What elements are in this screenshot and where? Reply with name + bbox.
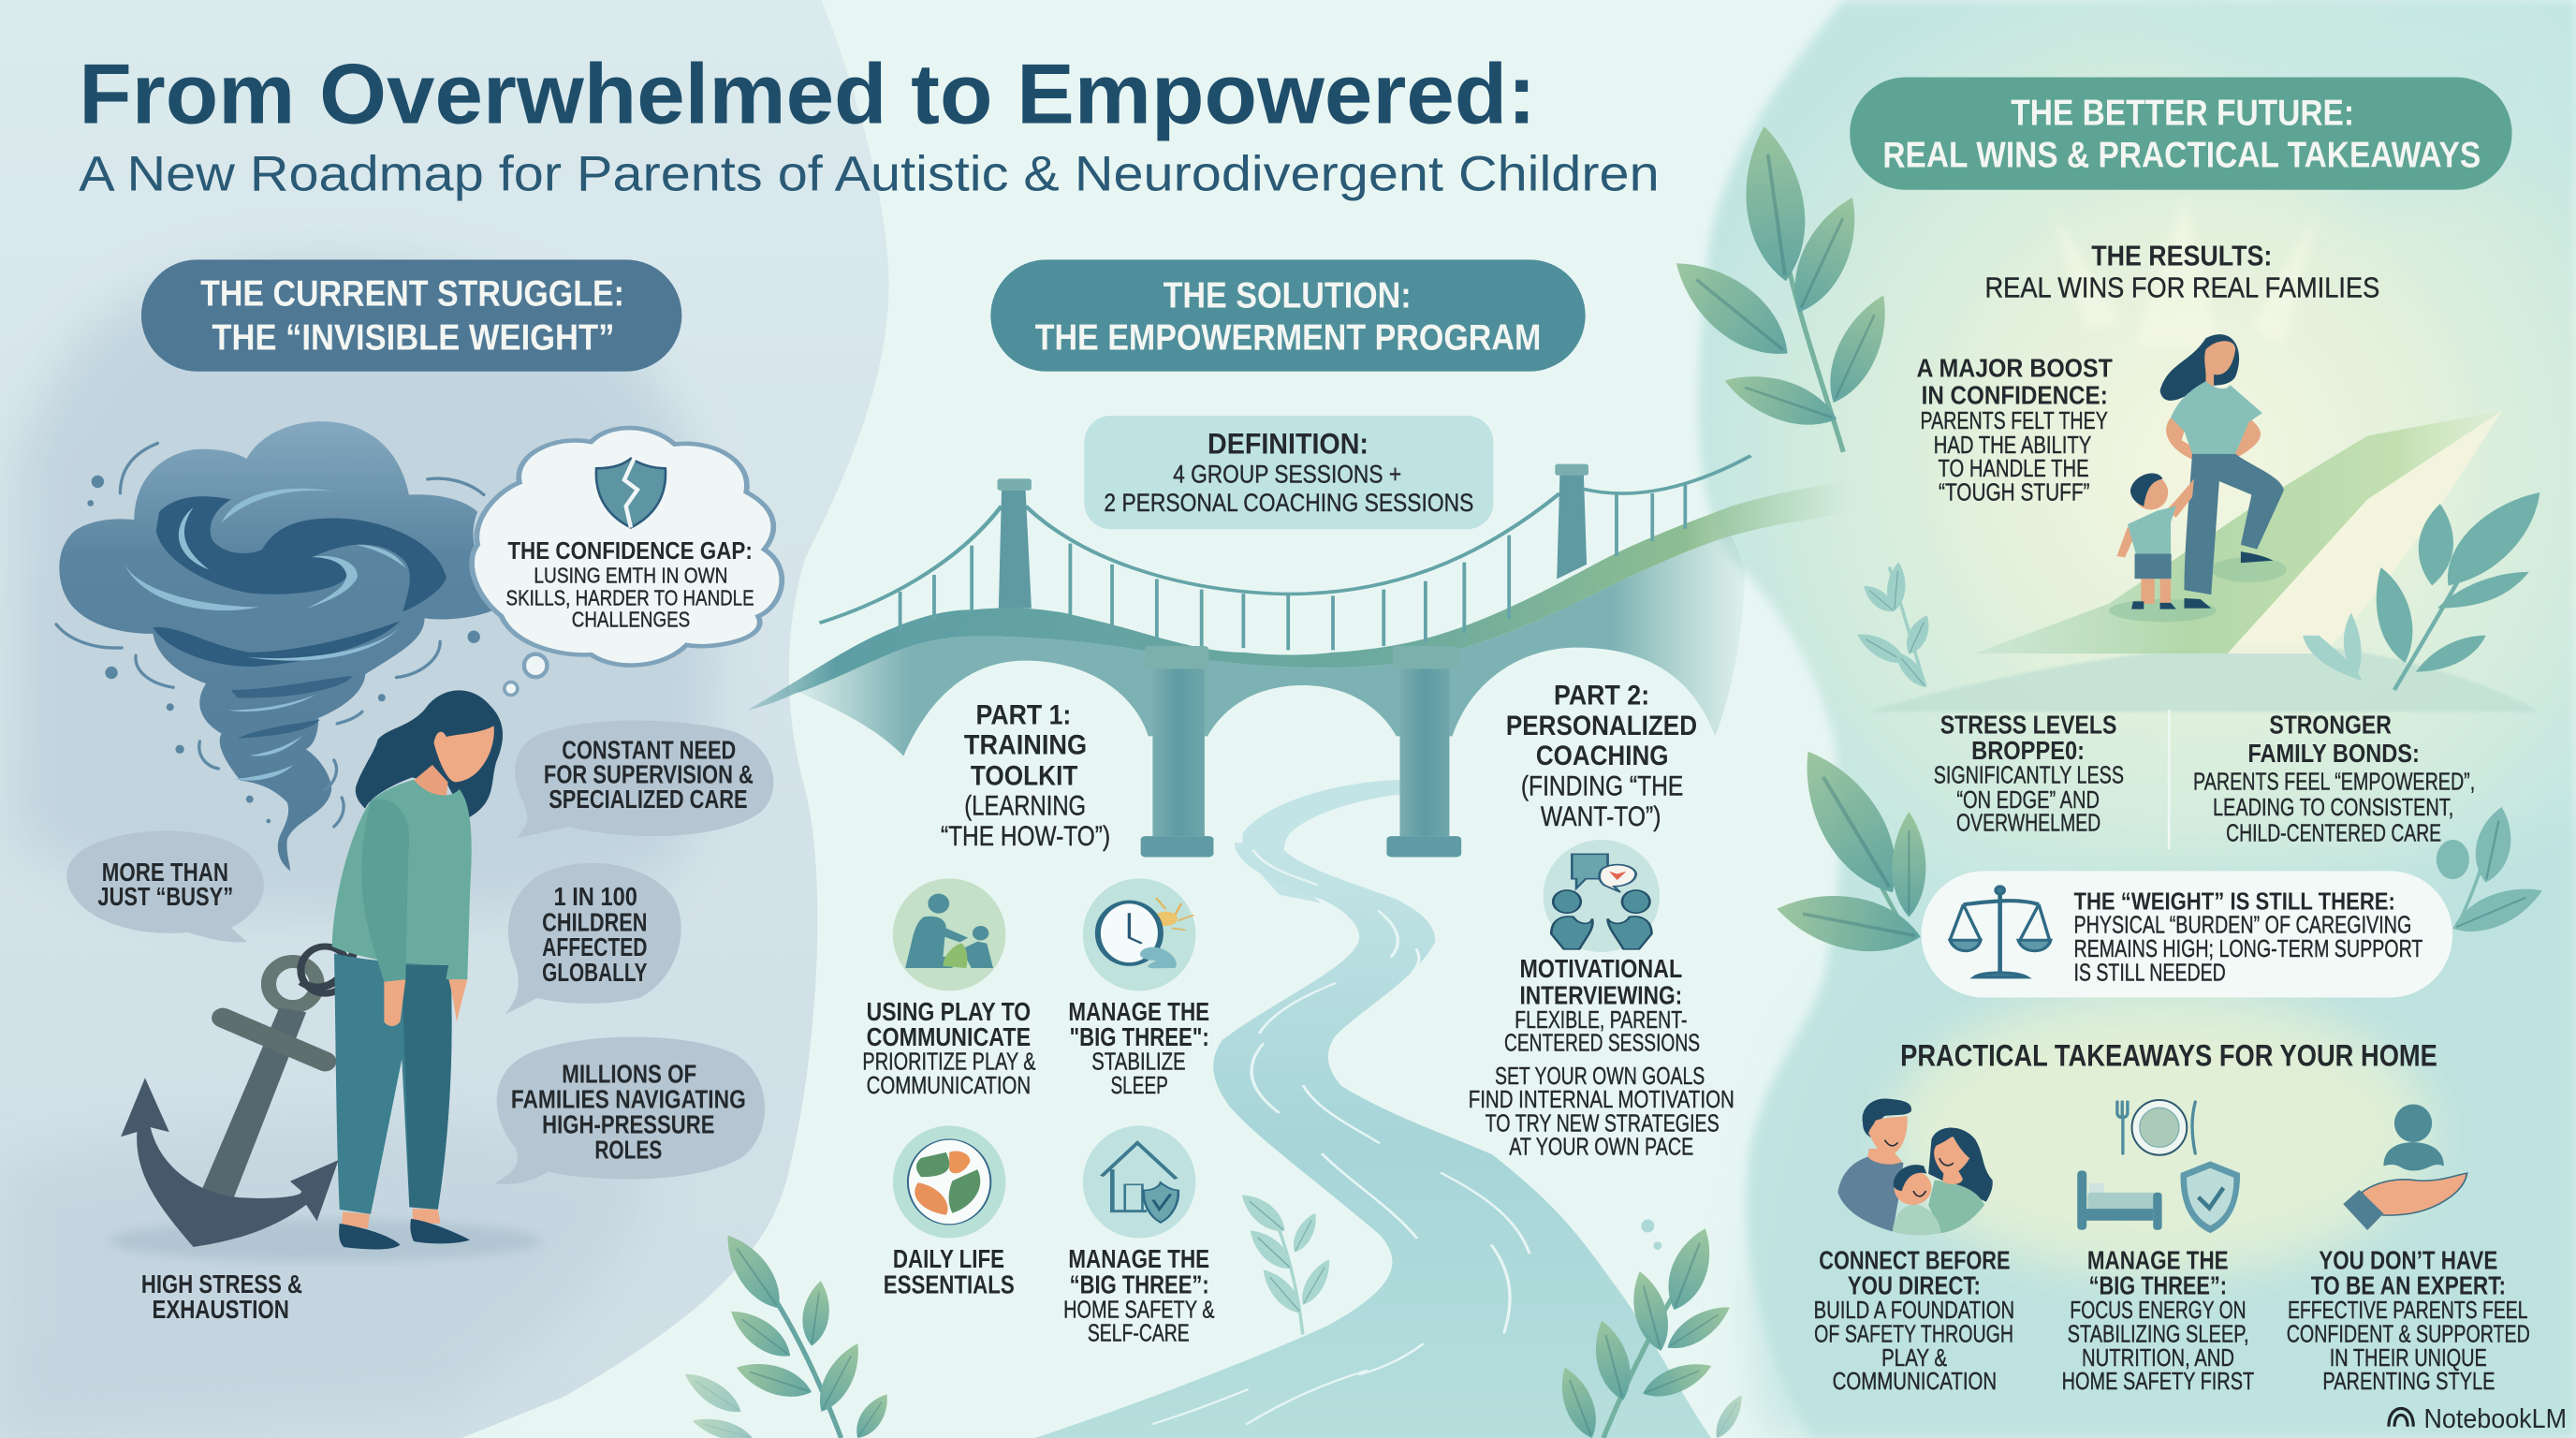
definition box: 4 GROUP SESSIONS + [1173,460,1401,489]
pill heading: current struggle [141,259,681,372]
icon: storm cloud [56,421,494,871]
panel: the solution [862,259,1734,1346]
pill heading: better future [1850,78,2512,190]
figure: confident mother [2160,334,2284,609]
takeaway: connect before you direct: OF SAFETY THROUGH [1814,1321,2013,1347]
hillside scene [1852,334,2539,712]
win: family bonds: PARENTS FEEL “EMPOWERED”, [2193,769,2475,795]
stat: high stress: HIGH STRESS & [141,1269,302,1299]
plant: lower centre left [680,1226,896,1438]
icon: clock and sun [1083,878,1195,990]
skill: big three sleep: STABILIZE [1091,1049,1186,1075]
icon: anchor [121,946,355,1247]
NotebookLM logo: NotebookLM [2423,1404,2567,1434]
stat: high stress [141,1269,302,1324]
plant: small sprig on hill [1852,562,1935,692]
win: confidence boost: PARENTS FELT THEY [1921,408,2108,434]
thought bubble: confidence gap: LUSING EMTH IN OWN [534,563,728,587]
skill: using play: PRIORITIZE PLAY & [862,1049,1036,1075]
win: family bonds [2193,710,2475,847]
icon: plate, bed and shield [2077,1100,2240,1233]
speech blob: one in one hundred: GLOBALLY [542,958,648,987]
icon: play together [893,878,1005,990]
thought bubble: confidence gap: SKILLS, HARDER TO HANDLE [506,586,754,610]
callout: the weight is still there [1922,871,2452,998]
takeaway: manage the big three: HOME SAFETY FIRST [2062,1369,2254,1395]
speech blob: more than busy [66,830,264,942]
win: stress dropped: STRESS LEVELS [1940,710,2116,739]
part 1 heading [941,699,1110,852]
pill heading: better future: THE BETTER FUTURE: [2011,93,2354,133]
panel: left background wash [0,0,889,1438]
takeaway: you do not have to be an expert: YOU DON’T HAVE [2319,1246,2497,1275]
icon: supportive hand and person [2343,1104,2467,1230]
pill heading: the solution: THE SOLUTION: [1164,275,1412,315]
speech blob: millions of families: MILLIONS OF [562,1059,696,1088]
skill: daily life [884,1244,1015,1299]
part 1 heading: “THE HOW-TO”) [941,821,1110,852]
skill: daily life: DAILY LIFE [893,1244,1004,1273]
subtitle: A New Roadmap for Parents of Autistic & Neurodivergent Children [79,147,1660,202]
skill: big three safety [1063,1244,1215,1346]
pill heading: the solution [990,259,1586,372]
takeaway: you do not have to be an expert: IN THEIR UNIQUE [2330,1345,2487,1372]
callout: the weight is still there: IS STILL NEEDED [2073,960,2226,986]
takeaway: manage the big three [2062,1246,2254,1395]
title: From Overwhelmed to Empowered: [79,47,1536,142]
speech blob: millions of families: FAMILIES NAVIGATING [511,1085,746,1114]
skill: motivational interviewing: FIND INTERNAL MOTIVATION [1469,1087,1734,1113]
icon: home safety [1083,1125,1195,1238]
win: confidence boost: HAD THE ABILITY [1934,433,2091,459]
pill heading: current struggle: THE “INVISIBLE WEIGHT” [212,317,614,358]
bridge piers [1141,646,1461,857]
definition box: DEFINITION: [1208,426,1368,460]
speech blob: millions of families: ROLES [594,1136,662,1165]
skill: big three safety: MANAGE THE [1068,1244,1209,1273]
skill: motivational interviewing: SET YOUR OWN GOALS [1495,1064,1705,1090]
skill: motivational interviewing: AT YOUR OWN PACE [1509,1135,1693,1161]
skill: motivational interviewing: FLEXIBLE, PARENT- [1515,1007,1687,1034]
skill: motivational interviewing [1469,954,1734,1161]
plant: beside river [1236,1187,1337,1334]
skill: using play: COMMUNICATION [867,1073,1031,1099]
takeaway: connect before you direct: BUILD A FOUNDATION [1814,1298,2014,1324]
icon: balance scale [1950,887,2051,977]
results heading: THE RESULTS: [2091,240,2272,272]
skill: big three safety: “BIG THREE”: [1070,1270,1209,1299]
pill heading: the solution: THE EMPOWERMENT PROGRAM [1035,317,1541,358]
speech blob: constant need: CONSTANT NEED [562,735,736,764]
skill: big three sleep: "BIG THREE": [1070,1022,1209,1051]
takeaway: manage the big three: NUTRITION, AND [2082,1345,2234,1372]
suspension cables and towers [820,456,1750,650]
definition box [1084,416,1493,529]
plant: upper right large [1660,123,1901,452]
pill heading: current struggle: THE CURRENT STRUGGLE: [200,274,624,315]
speech blob: one in one hundred: CHILDREN [542,907,648,936]
win: stress dropped: BROPPE0: [1971,736,2085,765]
takeaway: manage the big three: “BIG THREE”: [2089,1271,2227,1300]
part 2 heading: PART 2: [1554,680,1649,711]
icon: broken shield [596,459,666,527]
skill: big three safety: SELF-CARE [1088,1320,1190,1346]
definition box: 2 PERSONAL COACHING SESSIONS [1104,488,1473,517]
bridge [748,456,1850,857]
part 2 heading: WANT-TO”) [1541,801,1661,832]
skill: motivational interviewing: TO TRY NEW STRATEGIES [1486,1110,1720,1137]
bridge arches [795,536,1745,756]
speech blob: constant need: SPECIALIZED CARE [549,785,748,814]
speech blob: one in one hundred: 1 IN 100 [553,882,637,911]
skill: big three sleep: MANAGE THE [1068,997,1209,1026]
skill: using play: USING PLAY TO [867,997,1031,1026]
win: stress dropped [1934,710,2124,836]
win: stress dropped: SIGNIFICANTLY LESS [1934,763,2124,789]
river path [1034,780,1711,1438]
callout: the weight is still there: THE “WEIGHT” IS STILL THERE: [2073,888,2395,915]
results heading: REAL WINS FOR REAL FAMILIES [1985,271,2379,304]
skill: using play: COMMUNICATE [867,1022,1031,1051]
takeaways heading: PRACTICAL TAKEAWAYS FOR YOUR HOME [1900,1039,2437,1073]
thought bubble: confidence gap: CHALLENGES [572,608,690,632]
part 1 heading: TRAINING [964,730,1087,761]
part 2 heading: (FINDING “THE [1521,770,1683,801]
skill: big three safety: HOME SAFETY & [1063,1297,1215,1323]
speech blob: one in one hundred [505,863,681,1015]
icon: family [1837,1099,1993,1235]
speech blob: millions of families: HIGH-PRESSURE [542,1110,714,1139]
win: family bonds: FAMILY BONDS: [2247,739,2420,768]
win: confidence boost: A MAJOR BOOST [1917,354,2113,383]
skill: motivational interviewing: INTERVIEWING: [1519,981,1682,1010]
panel: current struggle [56,259,782,1324]
part 2 heading [1506,680,1697,832]
callout: the weight is still there: PHYSICAL “BURDEN” OF CAREGIVING [2073,913,2411,939]
speech blob: millions of families [494,1037,765,1184]
ground shadow [109,1220,542,1262]
part 1 heading: PART 1: [976,699,1071,730]
panel: the better future [1814,78,2539,1395]
icon: motivational conversation [1544,840,1660,952]
part 1 heading: TOOLKIT [971,761,1077,792]
speech blob: more than busy: MORE THAN [102,858,228,887]
win: confidence boost: TO HANDLE THE [1938,456,2089,482]
pill heading: better future: REAL WINS & PRACTICAL TAKEAWAYS [1882,135,2481,175]
win: confidence boost: IN CONFIDENCE: [1922,381,2108,410]
win: stress dropped: “ON EDGE” AND [1956,787,2100,814]
skill: motivational interviewing: MOTIVATIONAL [1519,954,1682,983]
icon: nutrition plate [893,1125,1005,1238]
results heading [1985,240,2379,304]
figure: overwhelmed mother [332,690,503,1249]
panel: right background wash [1698,0,2576,1438]
win: stress dropped: OVERWHELMED [1956,810,2100,836]
takeaway: you do not have to be an expert: TO BE AN EXPERT: [2311,1271,2506,1300]
takeaway: you do not have to be an expert: PARENTING STYLE [2322,1369,2495,1395]
plant: right of weight pill [2437,803,2548,943]
thought bubble: confidence gap: THE CONFIDENCE GAP: [507,538,753,565]
speech blob: one in one hundred: AFFECTED [542,932,648,961]
takeaway: you do not have to be an expert [2287,1246,2530,1395]
win: confidence boost: “TOUGH STUFF” [1939,479,2089,506]
skill: using play [862,997,1036,1099]
part 1 heading: (LEARNING [964,791,1086,822]
takeaway: connect before you direct: COMMUNICATION [1833,1369,1997,1395]
win: family bonds: LEADING TO CONSISTENT, [2213,795,2453,821]
skill: motivational interviewing: CENTERED SESSIONS [1504,1030,1700,1056]
takeaway: connect before you direct: PLAY & [1881,1345,1947,1372]
speech blob: more than busy: JUST “BUSY” [97,882,233,911]
speech blob: constant need: FOR SUPERVISION & [544,759,754,788]
skill: big three sleep [1068,997,1209,1099]
stat: high stress: EXHAUSTION [153,1295,289,1324]
win: family bonds: CHILD-CENTERED CARE [2226,821,2441,847]
win: confidence boost [1917,354,2113,506]
takeaway: manage the big three: FOCUS ENERGY ON [2070,1298,2247,1324]
skill: daily life: ESSENTIALS [884,1270,1015,1299]
plant: beside results text [1772,736,1925,962]
win: family bonds: STRONGER [2269,710,2392,739]
thought bubble: confidence gap [472,428,782,696]
title [79,47,1660,202]
part 2 heading: COACHING [1536,741,1668,771]
takeaway: connect before you direct: CONNECT BEFORE [1819,1246,2011,1275]
skill: big three sleep: SLEEP [1110,1073,1168,1099]
takeaway: manage the big three: MANAGE THE [2087,1246,2229,1275]
takeaway: connect before you direct [1814,1246,2014,1395]
part 2 heading: PERSONALIZED [1506,711,1697,741]
callout: the weight is still there: REMAINS HIGH; LONG-TERM SUPPORT [2073,936,2422,962]
figure: child [2117,473,2194,609]
bridge deck [748,480,1850,710]
takeaway: manage the big three: STABILIZING SLEEP, [2068,1321,2249,1347]
takeaway: connect before you direct: YOU DIRECT: [1848,1271,1981,1300]
speech blob: constant need [515,721,773,839]
plant: lower centre right [1552,1220,1749,1438]
